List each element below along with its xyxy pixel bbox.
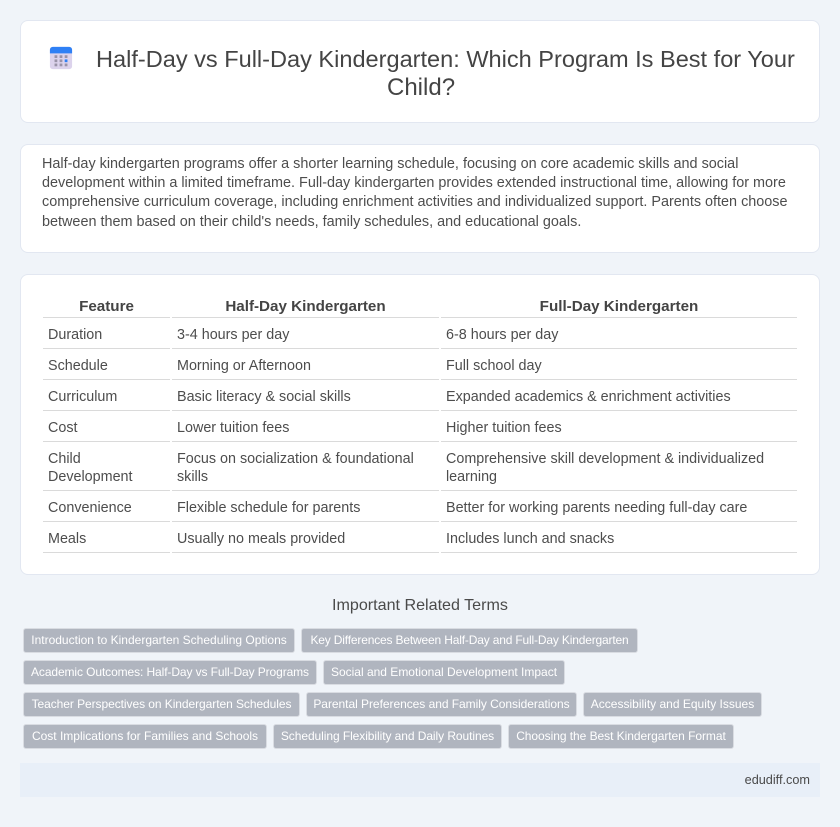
chip xyxy=(23,692,300,717)
row: curriculum xyxy=(48,389,731,405)
intro text: comprehensive curriculum coverage, including enrichment activities and individualized support. Parents often choose xyxy=(42,194,788,210)
row: meals xyxy=(48,531,614,547)
chip: Accessibility and Equity Issues xyxy=(591,697,754,711)
footer bar xyxy=(20,763,820,797)
chip xyxy=(273,724,502,749)
row: child development: learning xyxy=(446,469,497,485)
row: duration: 6-8 hours per day xyxy=(446,327,558,343)
chip: Parental Preferences and Family Considerations xyxy=(313,697,570,711)
chip: Social and Emotional Development Impact xyxy=(331,665,557,679)
chip xyxy=(301,628,638,653)
heading: important related terms: Important Related Terms xyxy=(332,596,508,614)
row: child development: skills xyxy=(177,469,208,485)
icon: calendar xyxy=(50,46,72,70)
row: cost: Cost xyxy=(48,420,78,436)
row: meals: Meals xyxy=(48,531,86,547)
chip xyxy=(583,692,762,717)
chip: Teacher Perspectives on Kindergarten Schedules xyxy=(32,697,291,711)
panel: introduction xyxy=(20,144,820,253)
panel: title header xyxy=(20,20,820,123)
row: duration xyxy=(48,327,558,343)
row: cost xyxy=(48,420,562,436)
row: schedule: Morning or Afternoon xyxy=(177,358,311,374)
row: curriculum: Expanded academics & enrichment activities xyxy=(446,389,731,405)
chip xyxy=(508,724,734,749)
table header xyxy=(79,298,698,315)
chip xyxy=(306,692,577,717)
row: child development: Child xyxy=(48,451,81,467)
row: duration: 3-4 hours per day xyxy=(177,327,289,343)
row: convenience xyxy=(48,500,747,516)
row: child development: Focus on socialization & foundational xyxy=(177,451,414,467)
panel: comparison table xyxy=(20,274,820,575)
row: convenience: Better for working parents needing full-day care xyxy=(446,500,747,516)
table header: Full-Day Kindergarten xyxy=(540,298,698,315)
row: curriculum: Basic literacy & social skills xyxy=(177,389,351,405)
chip: Introduction to Kindergarten Scheduling Options xyxy=(31,633,287,647)
row: schedule: Schedule xyxy=(48,358,108,374)
row: meals: Includes lunch and snacks xyxy=(446,531,614,547)
row: cost: Lower tuition fees xyxy=(177,420,289,436)
row: schedule xyxy=(48,358,542,374)
table header: Feature xyxy=(79,298,134,315)
chip: Academic Outcomes: Half-Day vs Full-Day Programs xyxy=(31,665,309,679)
chip: Scheduling Flexibility and Daily Routines xyxy=(281,729,494,743)
intro text: Half-day kindergarten programs offer a shorter learning schedule, focusing on core academic skills and social xyxy=(42,156,738,172)
row: duration: Duration xyxy=(48,327,102,343)
row: schedule: Full school day xyxy=(446,358,542,374)
chip xyxy=(323,660,565,685)
title: Half-Day vs Full-Day Kindergarten: Which Program Is Best for Your xyxy=(96,46,795,72)
row: convenience: Convenience xyxy=(48,500,132,516)
row: meals: Usually no meals provided xyxy=(177,531,345,547)
intro text: between them based on their child's needs, family schedules, and educational goals. xyxy=(42,214,581,230)
row: child development: Comprehensive skill development & individualized xyxy=(446,451,764,467)
chip xyxy=(23,628,295,653)
row: curriculum: Curriculum xyxy=(48,389,117,405)
intro text xyxy=(42,156,788,230)
chip xyxy=(23,660,317,685)
chip: Key Differences Between Half-Day and Full-Day Kindergarten xyxy=(310,633,629,647)
title: Child? xyxy=(387,74,455,101)
row: child development xyxy=(48,451,764,485)
chip: Choosing the Best Kindergarten Format xyxy=(516,729,726,743)
table header: Half-Day Kindergarten xyxy=(225,298,386,315)
title xyxy=(96,46,795,101)
row: child development: Development xyxy=(48,469,133,485)
term chips xyxy=(23,628,762,749)
footer source: edudiff.com xyxy=(745,773,810,787)
intro text: development within a limited timeframe. Full-day kindergarten provides extended instructional time, allowing for more xyxy=(42,175,786,191)
row: convenience: Flexible schedule for parents xyxy=(177,500,360,516)
chip xyxy=(23,724,267,749)
row: cost: Higher tuition fees xyxy=(446,420,562,436)
chip: Cost Implications for Families and Schools xyxy=(32,729,258,743)
